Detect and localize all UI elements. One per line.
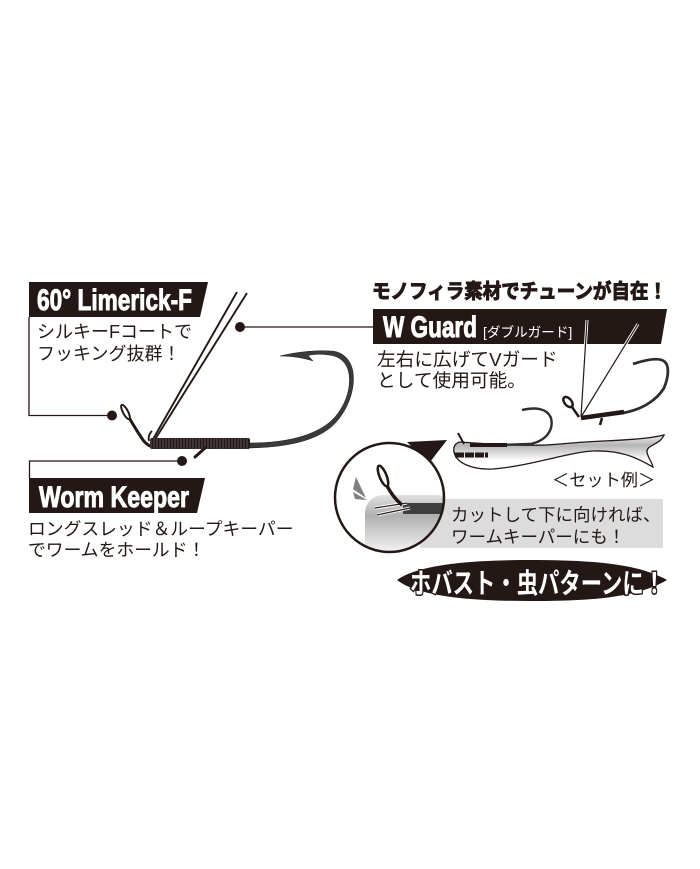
heading: 60° Limerick-F: 60° Limerick-F (37, 284, 192, 317)
icon: thread wrap shank (150, 438, 250, 449)
icon: V guard hook bend (623, 359, 668, 413)
icon: hook eye and bend (120, 404, 153, 447)
heading: W Guard: W Guard (383, 311, 477, 344)
text: silky F coat: シルキーFコートで (37, 322, 192, 342)
icon: loop keeper (195, 448, 205, 457)
text: cut and turn down: ワームキーパーにも！ (451, 527, 625, 547)
badge: hobasu mushi pattern (397, 560, 667, 601)
icon: double guard wires (149, 292, 247, 441)
leader line: Limerick to hook eye (29, 317, 117, 420)
text: V guard: 左右に広げてVガード (377, 349, 558, 370)
V guard hook illustration (561, 320, 668, 425)
heading: mono fila tune: モノフィラ素材でチューンが自在！ (372, 279, 667, 303)
heading: Worm Keeper: Worm Keeper (39, 481, 189, 514)
main hook illustration (120, 292, 353, 457)
gray caption band (420, 499, 663, 548)
worm with hook set example (454, 409, 664, 469)
leader line: W Guard to guard wire (235, 322, 374, 332)
leader line: Worm Keeper to keeper (30, 456, 187, 479)
text: long sled and loop keeper: でワームをホールド！ (28, 540, 205, 560)
text: silky F coat: フッキング抜群！ (37, 344, 180, 364)
text: V guard: として使用可能。 (377, 370, 526, 391)
text: long sled and loop keeper: ロングスレッド＆ループキーパー (28, 519, 293, 539)
heading: W Guard (373, 309, 667, 344)
icon: V guard wires (581, 320, 638, 417)
icon: hook in worm (455, 409, 552, 455)
icon: hook bend and point (250, 351, 353, 448)
detail callout circle (334, 440, 447, 554)
heading: W Guard: [ダブルガード] (483, 324, 572, 340)
caption: set example: ＜セット例＞ (552, 470, 655, 490)
icon: cut detail worm (365, 486, 443, 550)
icon: worm body (454, 435, 664, 469)
text: cut and turn down: カットして下に向ければ、 (451, 505, 660, 525)
